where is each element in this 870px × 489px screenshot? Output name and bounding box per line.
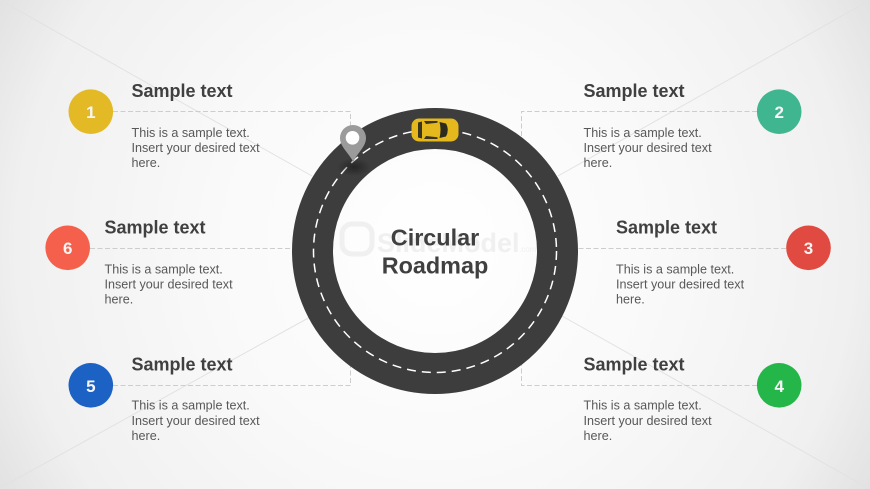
body 1: Insert your desired text [132, 141, 260, 155]
heading 4: Sample text [584, 354, 685, 374]
connector: item 1 [113, 112, 350, 126]
watermark: .com [519, 245, 537, 254]
item 6 [45, 218, 233, 307]
road centre dashes [314, 130, 556, 372]
badge 2: 2 [774, 103, 784, 122]
badge 3 [786, 226, 831, 270]
heading 6: Sample text [104, 218, 206, 238]
body 6: Insert your desired text [104, 278, 233, 292]
connector: item 3 [578, 248, 786, 250]
connector: item 6 [90, 248, 292, 250]
body 3: here. [616, 293, 645, 307]
body 6: This is a sample text. [104, 262, 223, 276]
item 5 [68, 354, 260, 443]
centre title: Roadmap [382, 252, 488, 278]
connector: item 5 [113, 358, 350, 386]
watermark [342, 224, 537, 258]
icon: location pin [337, 125, 371, 176]
item 2 [584, 81, 802, 170]
body 2: Insert your desired text [584, 141, 712, 155]
item 1 [68, 81, 260, 170]
circular road [312, 128, 558, 374]
badge 5: 5 [86, 377, 96, 396]
badge 2 [757, 89, 802, 134]
item 4 [584, 354, 802, 443]
heading 3: Sample text [616, 218, 717, 238]
badge 4 [757, 363, 802, 408]
heading 1: Sample text [132, 81, 233, 101]
connector: item 2 [522, 112, 757, 140]
body 2: This is a sample text. [584, 126, 702, 140]
body 5: here. [132, 429, 160, 443]
connector: item 4 [522, 358, 757, 386]
badge 4: 4 [774, 377, 784, 396]
badge 6: 6 [63, 239, 72, 258]
badge 1: 1 [86, 103, 96, 122]
body 1: This is a sample text. [132, 126, 250, 140]
body 4: here. [584, 429, 612, 443]
body 1: here. [132, 156, 160, 170]
body 4: Insert your desired text [584, 414, 712, 428]
badge 3: 3 [804, 239, 813, 258]
badge 5 [68, 363, 113, 408]
body 3: This is a sample text. [616, 262, 734, 276]
body 5: Insert your desired text [132, 414, 260, 428]
watermark: SlideModel [377, 228, 520, 258]
body 5: This is a sample text. [132, 398, 250, 412]
badge 6 [45, 226, 90, 270]
icon: car [412, 118, 458, 142]
heading 5: Sample text [132, 354, 233, 374]
badge 1 [68, 89, 113, 134]
heading 2: Sample text [584, 81, 685, 101]
body 3: Insert your desired text [616, 278, 745, 292]
road surface [312, 128, 558, 374]
body 4: This is a sample text. [584, 398, 702, 412]
body 2: here. [584, 156, 612, 170]
body 6: here. [104, 293, 133, 307]
item 3 [616, 218, 831, 307]
centre title: Circular [391, 225, 479, 251]
